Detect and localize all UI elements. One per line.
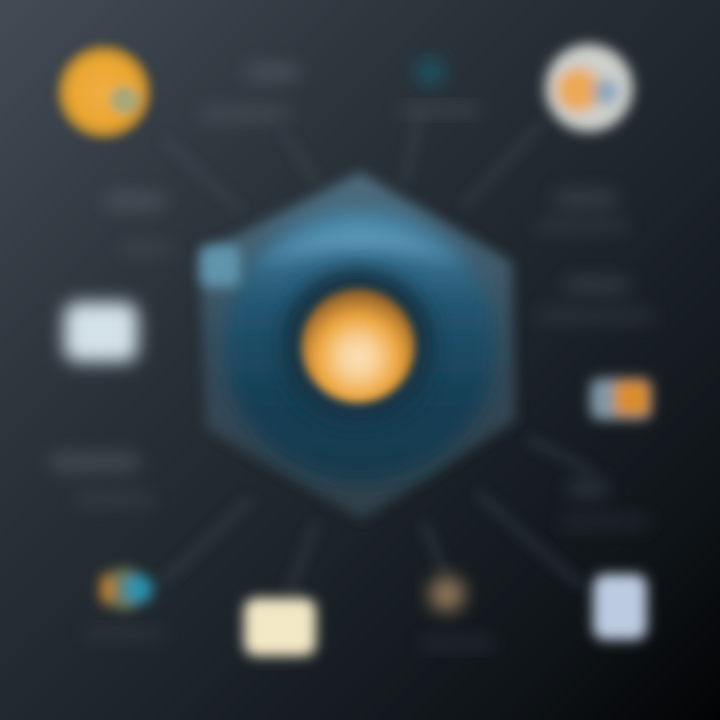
top highlight [255,228,465,265]
text block: lower right [560,480,650,528]
left corner accent [200,245,240,287]
icon: orange circle top left [57,45,151,139]
icon: teal mark top [416,58,444,86]
icon: peach and blue circle top right [545,44,633,132]
dark inner ring [280,268,436,424]
icon: pale card left [64,302,138,362]
blue ring [224,210,496,482]
text block: top right [400,103,480,117]
connector lines [165,115,590,590]
text block: top centre [200,64,299,122]
orange orb [301,289,415,403]
text block: upper right [535,190,655,322]
text block: bottom captions [85,628,495,649]
text block: upper left [105,193,175,255]
hexagon frame [200,172,516,520]
central hexagon hub [200,172,516,520]
icon: pale blue card bottom right [593,574,647,640]
icon: orange and teal circle bottom left [100,568,153,610]
text block: lower left [50,453,155,505]
icon: cream card bottom [244,598,316,656]
icon: tan circle bottom [429,576,465,612]
icon: orange and blue card right [590,378,652,420]
